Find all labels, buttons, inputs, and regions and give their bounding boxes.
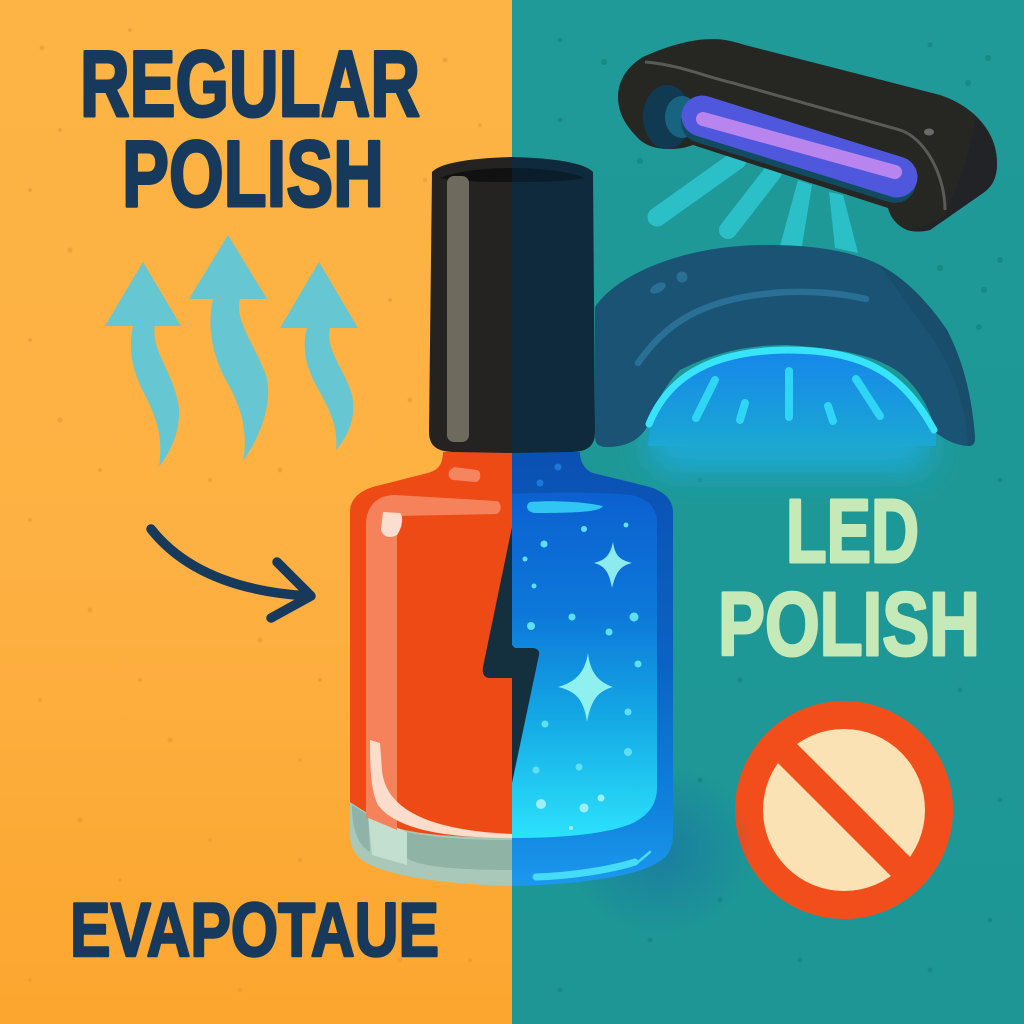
heading: regular polish: POLISH	[122, 121, 384, 226]
bottle body	[350, 452, 673, 886]
heading: LED polish: LED	[786, 482, 919, 582]
icon: UV light rays	[657, 160, 858, 253]
cap	[429, 157, 595, 453]
blue half	[512, 440, 684, 890]
icon: evaporation arrows	[105, 235, 358, 467]
lightning bolt	[483, 527, 539, 783]
sparkle large	[558, 653, 613, 722]
panel: orange regular polish background	[0, 0, 512, 1024]
icon: nail polish bottle	[340, 157, 755, 935]
sparkle small	[594, 542, 632, 588]
heading: regular polish	[80, 31, 420, 226]
arrow: pointing to bottle	[151, 529, 311, 618]
red half	[350, 452, 512, 886]
heading: evapotaue: EVAPOTAUE	[70, 888, 439, 973]
bottle shadow glow	[565, 765, 755, 935]
heading: regular polish: REGULAR	[80, 31, 420, 136]
icon: no symbol	[735, 701, 953, 919]
heading: LED polish	[718, 482, 980, 675]
icon: UV lamp wand	[618, 39, 997, 232]
icon: LED lamp dome	[595, 245, 975, 473]
panel: teal LED polish background	[512, 0, 1024, 1024]
